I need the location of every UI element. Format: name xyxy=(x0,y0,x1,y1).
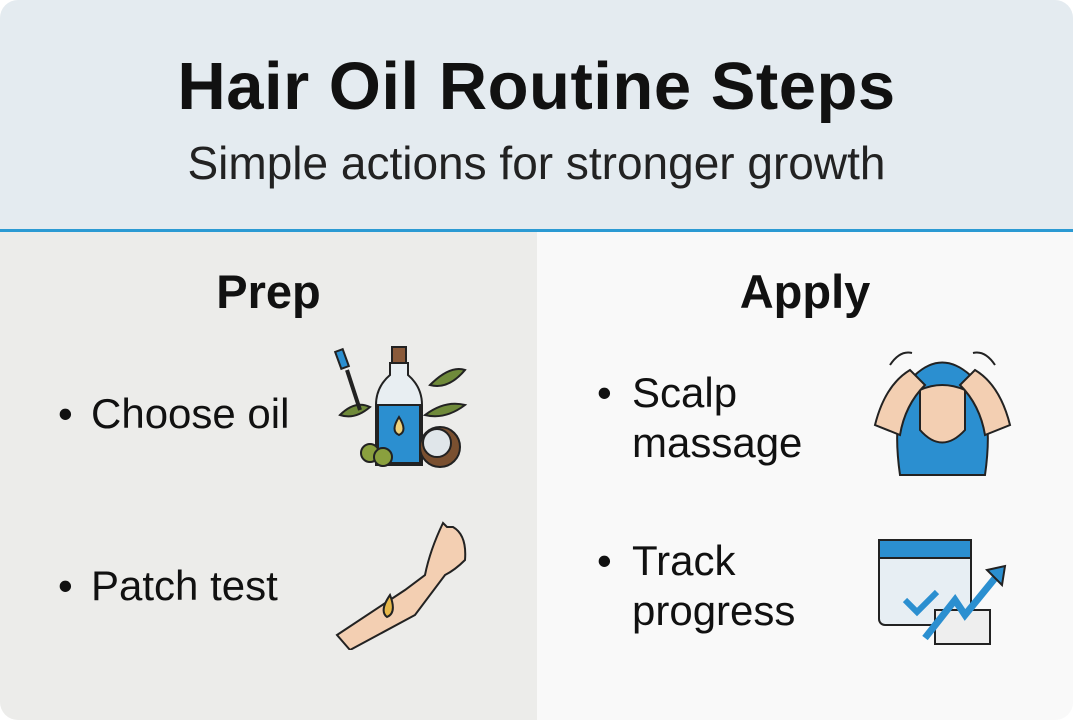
title: Hair Oil Routine Steps xyxy=(177,49,896,124)
icon: arm with oil drop xyxy=(336,521,466,650)
icon: oil bottle xyxy=(334,346,468,468)
bullet: scalp massage: massage xyxy=(632,419,802,466)
header xyxy=(0,0,1073,230)
heading: apply: Apply xyxy=(740,265,870,318)
bullet: choose oil: • xyxy=(58,390,73,437)
panel: prep xyxy=(0,232,537,720)
bullet: patch test: Patch test xyxy=(91,562,278,609)
icon: scalp massage head xyxy=(874,352,1012,476)
bullet: scalp massage: Scalp xyxy=(632,369,737,416)
bullet: track progress: • xyxy=(597,537,612,584)
bullet: scalp massage: • xyxy=(597,369,612,416)
bullet: scalp massage xyxy=(597,369,802,466)
bullet: choose oil: Choose oil xyxy=(91,390,289,437)
bullet: track progress xyxy=(597,537,795,634)
heading: prep: Prep xyxy=(216,265,321,318)
icon: calendar with progress xyxy=(878,539,1006,645)
panel: apply xyxy=(537,232,1073,720)
bullet: track progress: progress xyxy=(632,587,795,634)
bullet: patch test: • xyxy=(58,562,73,609)
bullet: track progress: Track xyxy=(632,537,735,584)
subtitle: Simple actions for stronger growth xyxy=(188,137,885,189)
